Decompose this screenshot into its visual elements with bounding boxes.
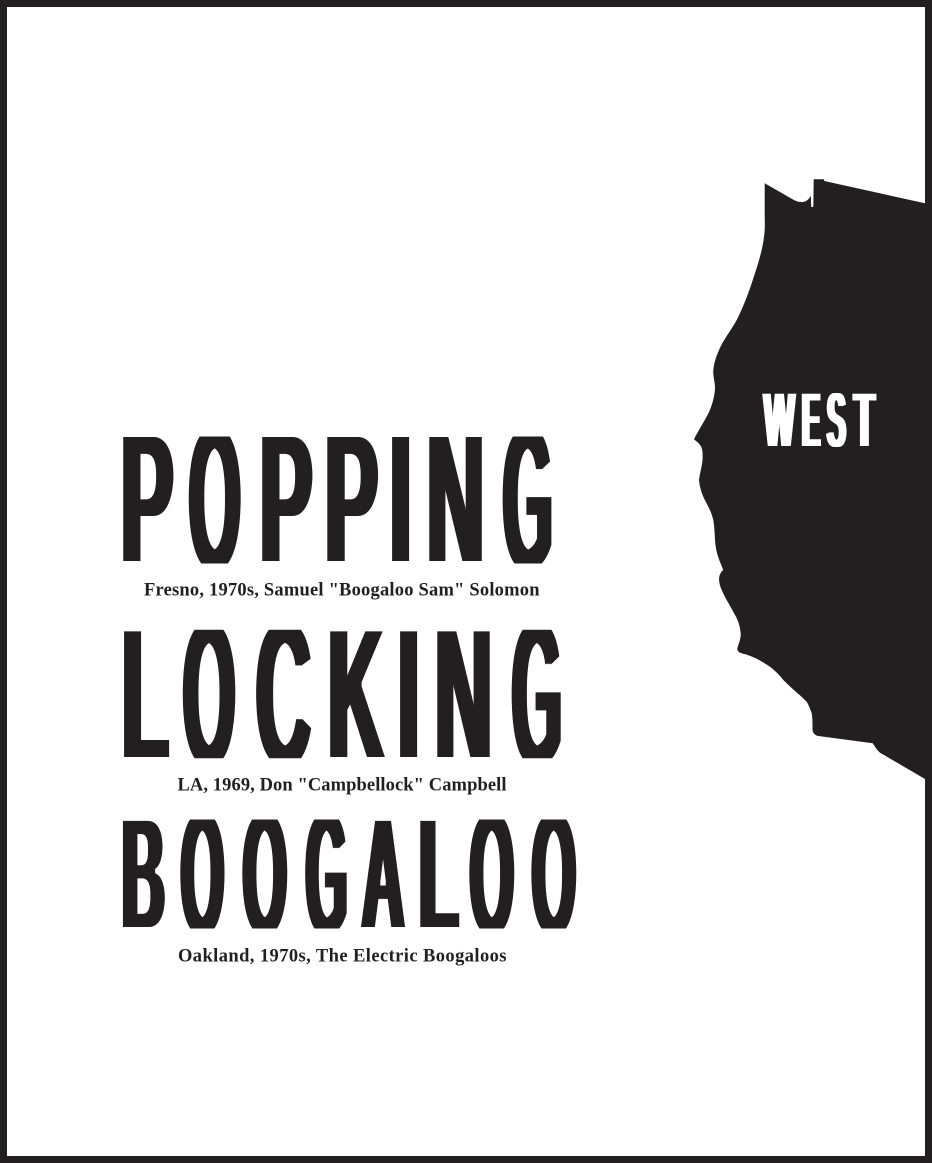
heading: POPPING: P (260, 396, 312, 603)
label: WEST (762, 376, 876, 464)
heading: BOOGALOO: O (470, 775, 514, 972)
label: WEST: T (854, 376, 874, 464)
label: WEST: W (764, 376, 795, 464)
heading: BOOGALOO: O (532, 775, 576, 972)
heading: BOOGALOO: A (362, 784, 404, 963)
heading: POPPING: I (390, 396, 411, 603)
heading: POPPING: G (503, 385, 552, 613)
heading: LOCKING (122, 588, 561, 799)
heading: LOCKING: L (122, 588, 168, 799)
heading: LOCKING: K (328, 588, 384, 799)
heading: BOOGALOO: B (122, 784, 164, 963)
caption: boogaloo origin: Oakland, 1970s, The Electric Boogaloos (178, 946, 506, 966)
heading: BOOGALOO (122, 784, 576, 963)
heading: POPPING: O (189, 385, 241, 613)
heading: POPPING: P (121, 396, 173, 603)
heading: BOOGALOO: L (419, 784, 458, 963)
heading: BOOGALOO: O (181, 775, 224, 972)
label: WEST: E (802, 376, 820, 464)
heading: LOCKING: C (256, 577, 311, 810)
heading: LOCKING: I (398, 588, 419, 799)
label: WEST: S (827, 376, 846, 464)
heading: POPPING (121, 396, 552, 603)
heading: LOCKING: N (435, 588, 492, 799)
caption: locking origin: LA, 1969, Don "Campbellock" Campbell (178, 776, 506, 796)
heading: BOOGALOO: G (306, 775, 347, 972)
heading: LOCKING: G (512, 577, 562, 810)
caption: popping origin: Fresno, 1970s, Samuel "Boogaloo Sam" Solomon (144, 580, 540, 600)
heading: BOOGALOO: O (243, 775, 287, 972)
heading: POPPING: P (325, 396, 378, 603)
heading: LOCKING: O (183, 577, 235, 810)
heading: POPPING: N (427, 396, 484, 603)
